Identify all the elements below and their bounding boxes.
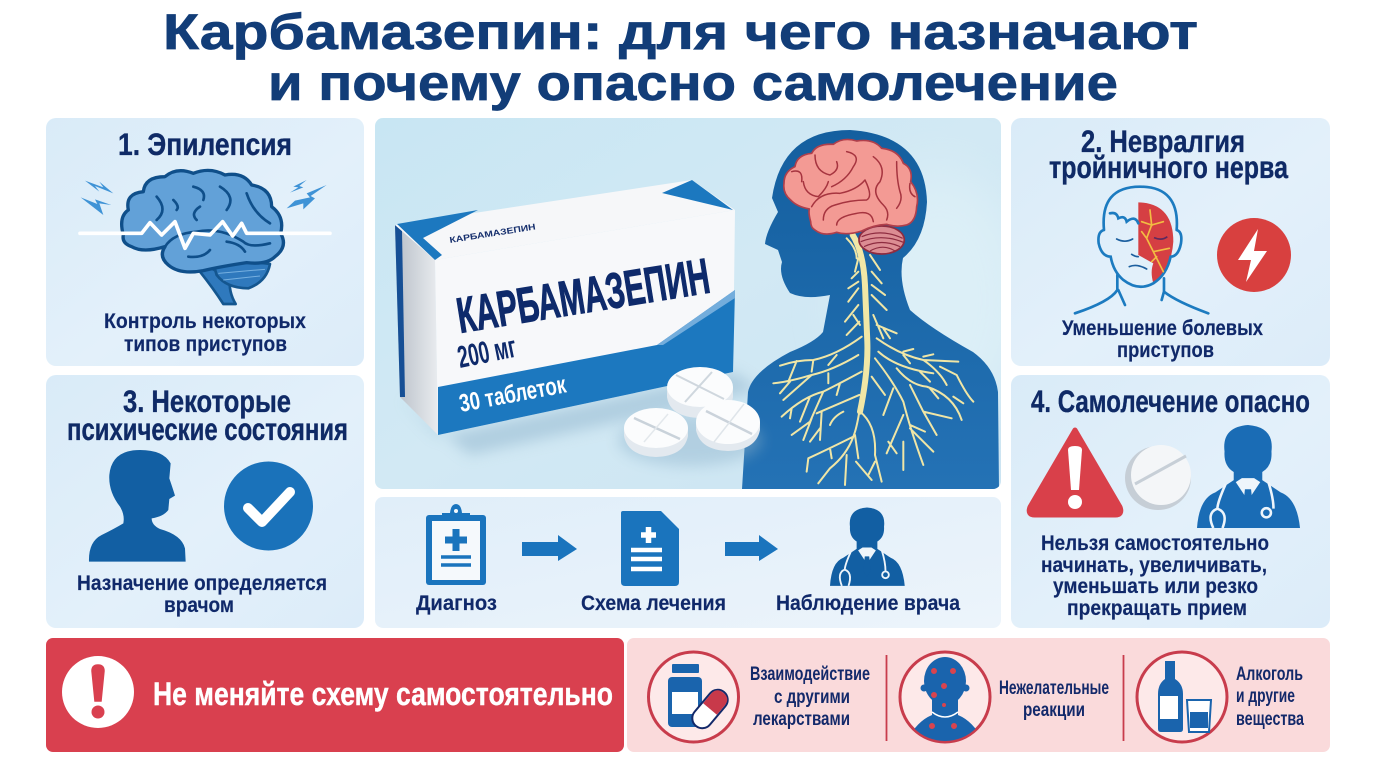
heading: mental conditions: 3. Некоторые — [123, 383, 291, 419]
icon: face with nerve pain — [1075, 187, 1208, 313]
text: interactions: с другими — [774, 686, 850, 708]
icon: doctor — [830, 507, 905, 586]
text: reactions: реакции — [1023, 699, 1085, 721]
panel: trigeminal neuralgia — [1011, 118, 1330, 366]
text: pain reduction — [1062, 316, 1263, 362]
text: alcohol: и другие — [1236, 685, 1295, 707]
cerebellum — [859, 226, 904, 254]
icon: pill — [1125, 445, 1191, 510]
title: и почему опасно самолечение — [268, 55, 1118, 111]
flow labels — [416, 591, 961, 615]
icon: pain bolt — [1217, 218, 1291, 292]
seizure line — [80, 222, 330, 248]
heading: neuralgia — [1049, 123, 1288, 185]
text: reactions: Нежелательные — [999, 677, 1109, 699]
pill top — [667, 367, 733, 418]
arrow — [522, 535, 577, 561]
text: alcohol — [1236, 663, 1304, 730]
pill shadows — [618, 414, 762, 466]
heading: mental conditions — [67, 383, 348, 447]
flow labels: Диагноз — [416, 591, 497, 615]
text: epilepsy note: типов приступов — [124, 332, 287, 356]
flow labels: Наблюдение врача — [776, 591, 961, 615]
icon: exclamation — [62, 656, 134, 728]
text: interactions — [750, 663, 870, 730]
text: reactions — [999, 677, 1109, 721]
text: alcohol: Алкоголь — [1236, 663, 1303, 685]
pill right — [696, 400, 760, 451]
icon: alcohol — [1137, 652, 1227, 742]
box label main: КАРБАМАЗЕПИН — [453, 248, 713, 344]
panel: epilepsy — [46, 118, 364, 366]
brain — [784, 139, 918, 234]
nerves — [773, 139, 973, 485]
title — [163, 4, 1198, 111]
heading: mental conditions: психические состояния — [67, 411, 348, 447]
text: alcohol: вещества — [1236, 708, 1304, 730]
box count: 30 таблеток — [457, 370, 569, 418]
banner: warning — [46, 638, 624, 752]
pills — [618, 367, 762, 466]
text: epilepsy note — [104, 309, 306, 356]
text: doctor decides: Назначение определяется — [77, 571, 327, 595]
medicine box — [395, 180, 760, 455]
text: warning: начинать, увеличивать, — [1041, 553, 1267, 577]
icon: person silhouette — [89, 450, 186, 562]
text: interactions: лекарствами — [753, 708, 850, 730]
box label small: КАРБАМАЗЕПИН — [449, 221, 536, 245]
panel: treatment flow — [375, 497, 1001, 628]
icon: brain with seizure line — [80, 170, 330, 304]
text: warning — [1041, 531, 1269, 620]
title: Карбамазепин: для чего назначают — [163, 4, 1198, 60]
banner text: Не меняйте схему самостоятельно — [153, 676, 613, 712]
text: warning: Нельзя самостоятельно — [1041, 531, 1269, 555]
text: doctor decides — [77, 571, 327, 617]
panel: mental conditions — [46, 375, 364, 628]
text: interactions: Взаимодействие — [750, 663, 870, 685]
heading: epilepsy: 1. Эпилепсия — [118, 126, 292, 162]
person with nervous system — [742, 130, 999, 489]
heading: neuralgia: 2. Невралгия — [1081, 123, 1245, 159]
flow labels: Схема лечения — [581, 591, 726, 615]
text: pain reduction: приступов — [1117, 338, 1214, 362]
panel: risks — [627, 638, 1330, 752]
icon: adverse reactions — [900, 652, 990, 745]
text: doctor decides: врачом — [164, 593, 234, 617]
text: epilepsy note: Контроль некоторых — [104, 309, 306, 333]
panel: self-treatment danger — [1011, 375, 1330, 628]
icon: clipboard — [426, 504, 486, 585]
panel: central illustration — [375, 118, 1030, 489]
icon: check mark — [224, 462, 313, 550]
text: pain reduction: Уменьшение болевых — [1062, 316, 1263, 340]
box dose: 200 мг — [454, 329, 519, 375]
icon: treatment document — [621, 511, 679, 586]
text: warning: прекращать прием — [1067, 596, 1247, 620]
text: warning: уменьшать или резко — [1053, 574, 1258, 598]
icon: drug interaction — [648, 652, 738, 742]
icon: warning triangle — [1029, 430, 1121, 515]
pill left — [624, 408, 688, 457]
arrow — [725, 535, 778, 561]
heading: neuralgia: тройничного нерва — [1049, 149, 1288, 185]
icon: doctor — [1197, 425, 1300, 528]
